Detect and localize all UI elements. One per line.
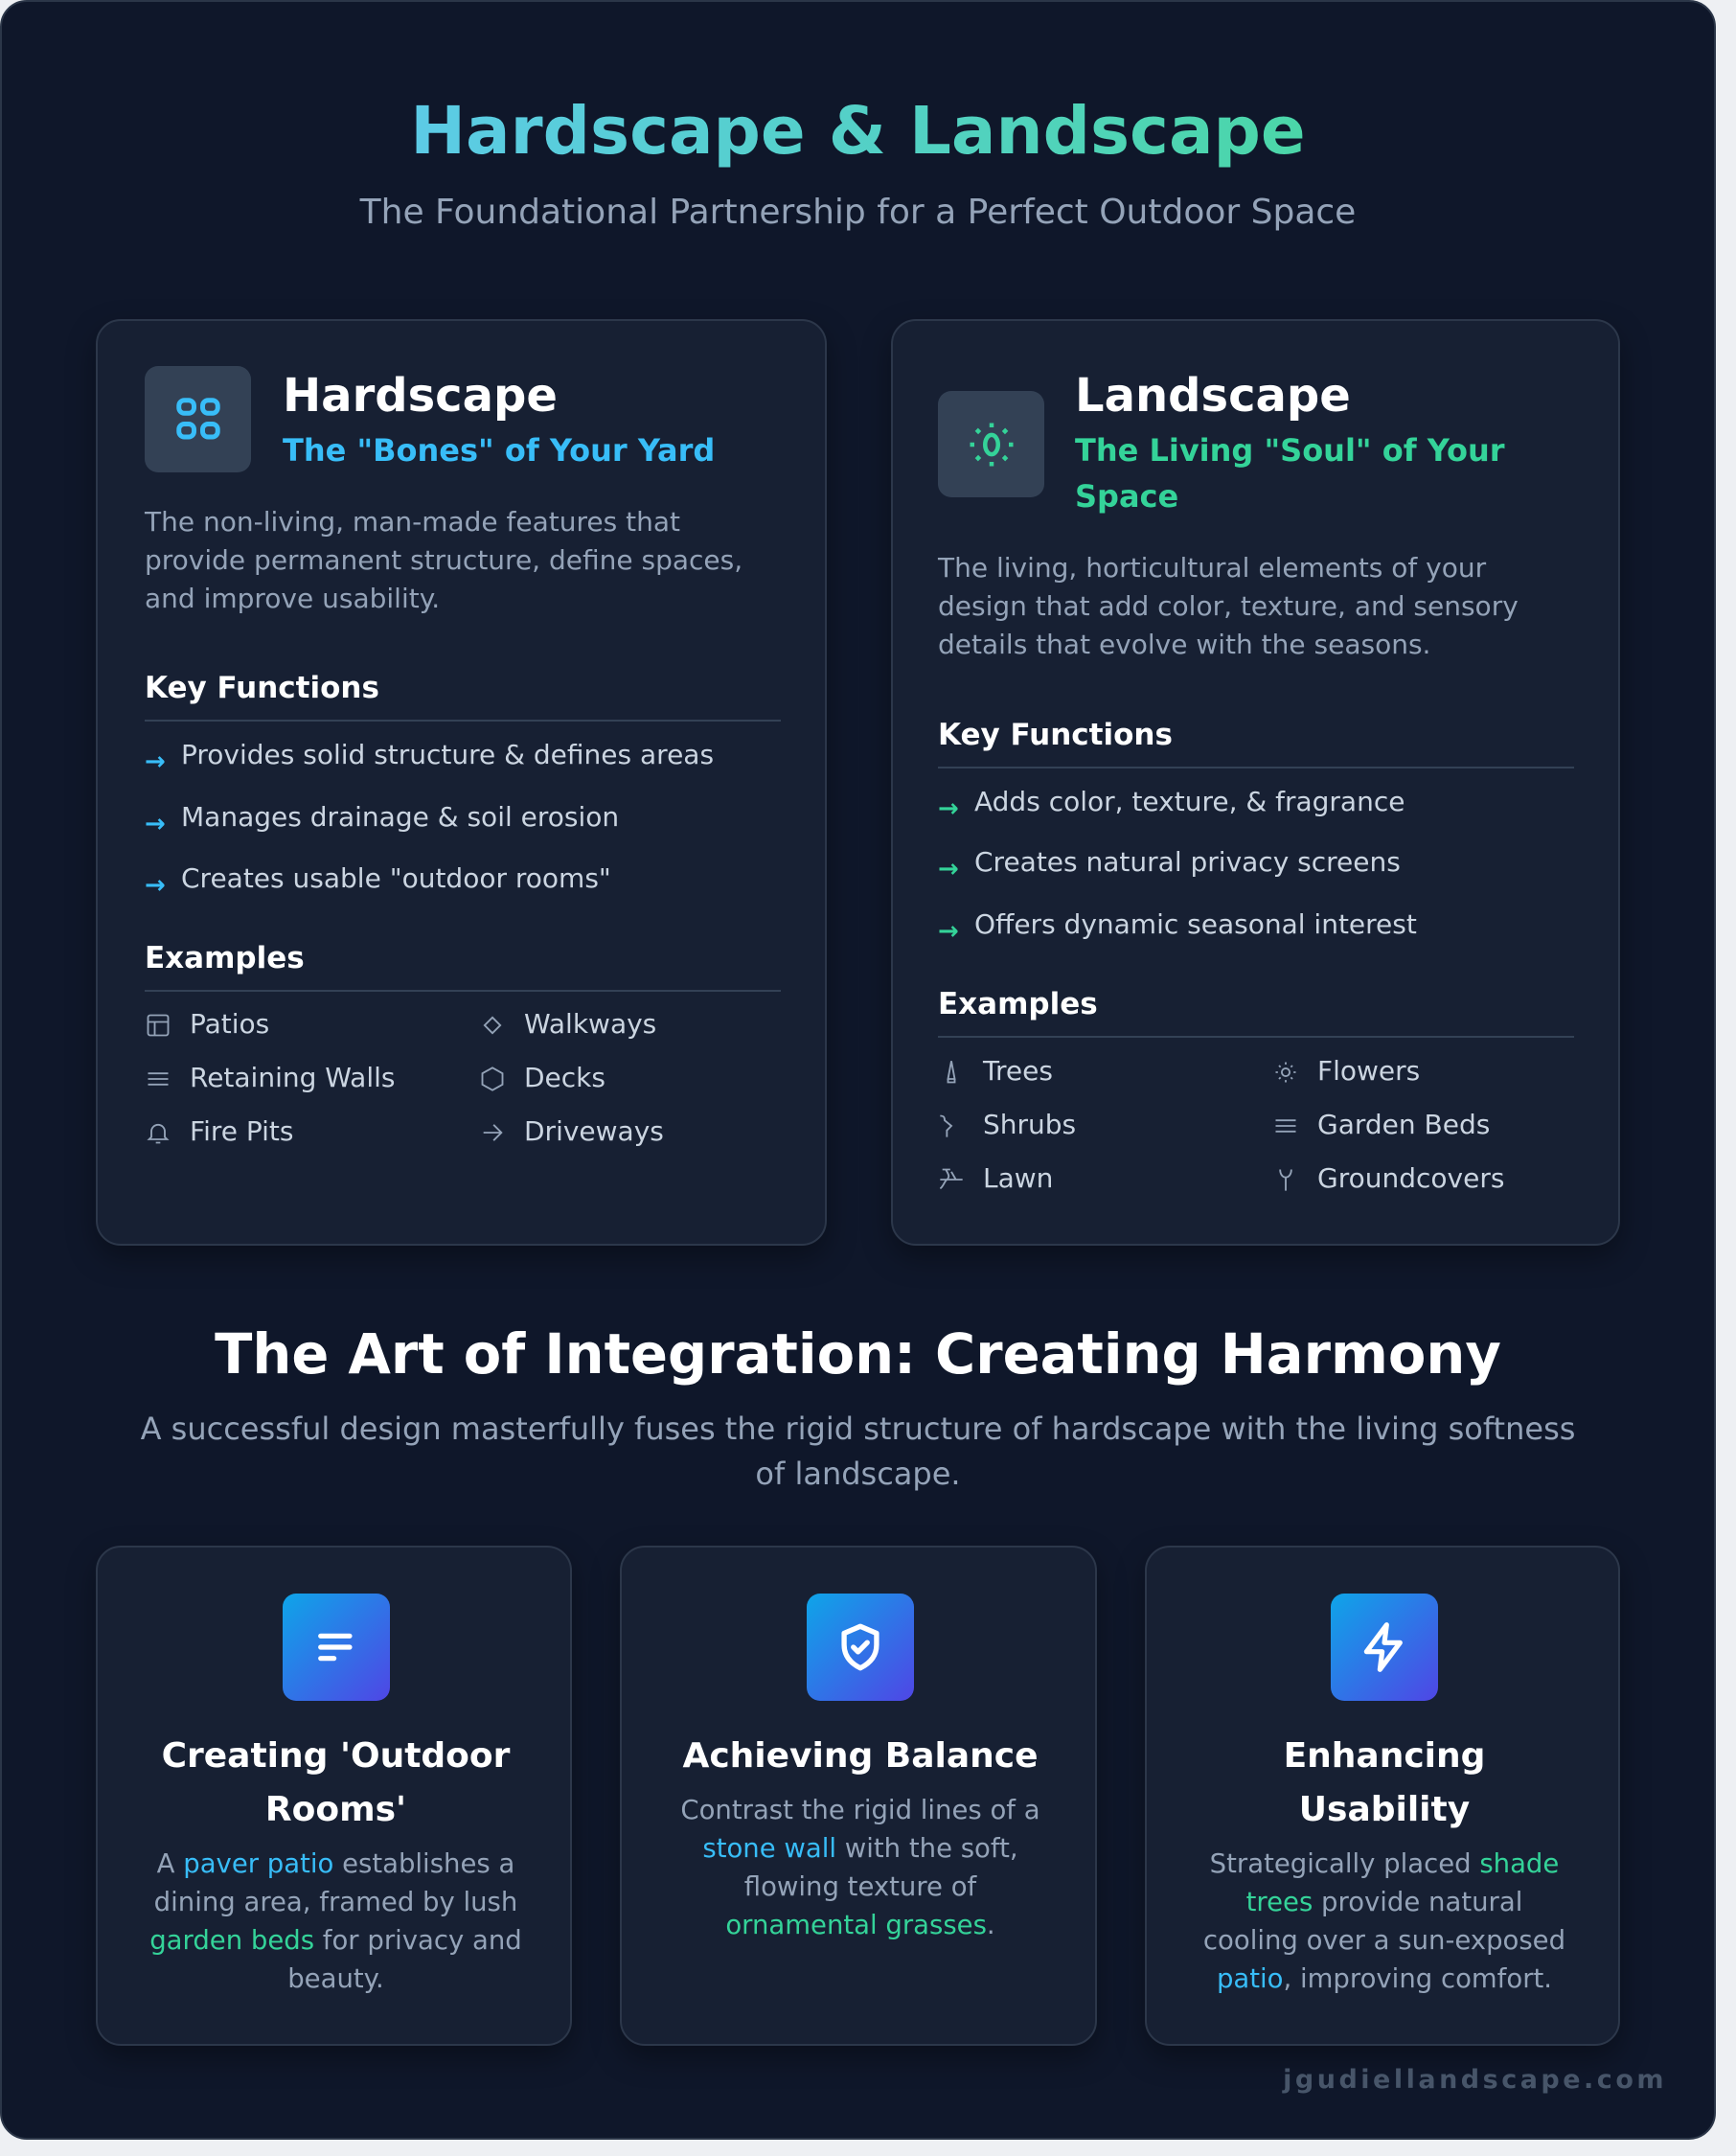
tagline: Space — [1075, 478, 1178, 515]
function list — [938, 786, 1417, 946]
section heading: The Art of Integration: Creating Harmony — [215, 1322, 1501, 1387]
function list: → — [938, 917, 959, 946]
section intro: A successful design masterfully fuses the rigid structure of hardscape with the living softness of landscape. — [141, 1411, 1575, 1492]
card title: Enhancing — [1284, 1736, 1485, 1776]
examples grid: Walkways — [524, 1008, 656, 1040]
icon: bolt — [1331, 1594, 1438, 1701]
key functions heading: Key Functions — [938, 718, 1173, 752]
card title: Achieving Balance — [682, 1736, 1039, 1776]
function list: Manages drainage & soil erosion — [181, 801, 619, 833]
examples grid: Groundcovers — [1317, 1162, 1504, 1194]
examples grid: Driveways — [524, 1115, 664, 1147]
icon: grid — [145, 366, 251, 472]
function list: → — [145, 810, 166, 838]
examples grid: Decks — [524, 1062, 605, 1093]
function list: Provides solid structure & defines areas — [181, 739, 714, 770]
key functions heading: Key Functions — [145, 671, 379, 705]
examples heading: Examples — [938, 987, 1098, 1021]
examples grid — [940, 1055, 1504, 1194]
function list: Offers dynamic seasonal interest — [974, 908, 1417, 940]
panel: hardscape — [96, 319, 827, 1246]
heading: Landscape — [1075, 369, 1351, 423]
function list: Creates usable "outdoor rooms" — [181, 862, 611, 894]
card title: Creating 'Outdoor — [162, 1736, 510, 1776]
footer url: jgudiellandscape.com — [1283, 2065, 1667, 2095]
card text: A paver patio establishes a dining area, framed by lush garden beds for privacy and beauty. — [149, 1848, 522, 1994]
card title: Usability — [1299, 1790, 1470, 1829]
examples grid: Trees — [983, 1055, 1053, 1087]
card: balance — [620, 1546, 1097, 2046]
card text: Strategically placed shade trees provide natural cooling over a sun-exposed patio, improving comfort. — [1203, 1848, 1565, 1994]
panel: landscape — [891, 319, 1620, 1246]
heading: Hardscape — [283, 369, 558, 423]
subtitle: The Foundational Partnership for a Perfect Outdoor Space — [360, 193, 1356, 232]
function list: → — [145, 871, 166, 900]
examples grid: Shrubs — [983, 1109, 1076, 1140]
examples grid: Patios — [190, 1008, 269, 1040]
function list: Adds color, texture, & fragrance — [974, 786, 1405, 817]
icon: lines — [283, 1594, 390, 1701]
examples grid: Lawn — [983, 1162, 1053, 1194]
tagline — [1075, 432, 1505, 515]
card: outdoor rooms — [96, 1546, 572, 2046]
tagline: The Living "Soul" of Your — [1075, 432, 1505, 469]
icon: shield — [807, 1594, 914, 1701]
card text: Contrast the rigid lines of a stone wall with the soft, flowing texture of ornamental grasses. — [680, 1795, 1040, 1940]
function list: → — [938, 794, 959, 823]
function list — [145, 739, 714, 900]
title: Hardscape & Landscape — [410, 93, 1306, 170]
tagline: The "Bones" of Your Yard — [283, 432, 715, 469]
function list: → — [145, 747, 166, 776]
card title — [1284, 1736, 1485, 1829]
examples grid: Flowers — [1317, 1055, 1420, 1087]
description: The living, horticultural elements of your design that add color, texture, and sensory details that evolve with the seasons. — [938, 552, 1519, 660]
examples grid — [148, 1008, 664, 1147]
examples grid: Garden Beds — [1317, 1109, 1490, 1140]
function list: Creates natural privacy screens — [974, 846, 1401, 878]
examples grid: Fire Pits — [190, 1115, 293, 1147]
function list: → — [938, 855, 959, 883]
card title: Rooms' — [265, 1790, 406, 1829]
examples grid: Retaining Walls — [190, 1062, 395, 1093]
card: usability — [1145, 1546, 1620, 2046]
card title — [162, 1736, 510, 1829]
examples heading: Examples — [145, 941, 305, 975]
description: The non-living, man-made features that provide permanent structure, define spaces, and improve usability. — [145, 506, 742, 614]
icon: sun — [938, 391, 1044, 497]
